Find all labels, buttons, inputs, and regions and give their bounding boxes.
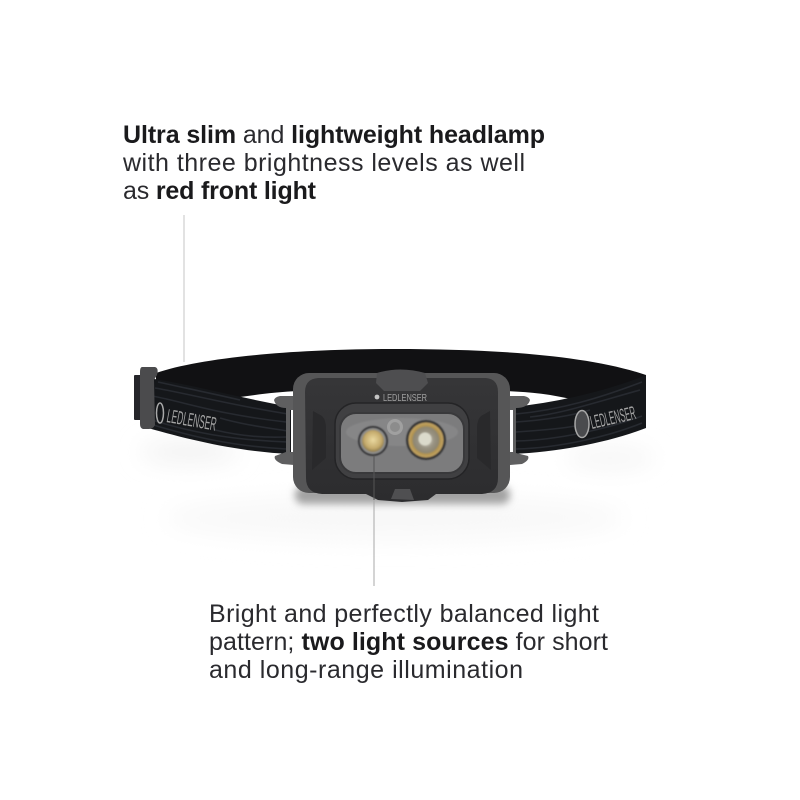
rear strap band: [156, 349, 646, 400]
text block: lower callout text: pattern; two light sources for short: [209, 628, 608, 656]
large LED: [406, 420, 446, 460]
heading: top callout text: with three brightness levels as well: [122, 149, 525, 177]
side clips: [274, 396, 530, 465]
leader line: lower callout to LED: [373, 456, 375, 586]
right front strap with logo: LEDLENSER: [588, 403, 638, 434]
heading: top callout text: as red front light: [123, 177, 317, 205]
bottom clip: [391, 489, 414, 500]
left front strap with logo: [148, 378, 291, 454]
leader line: top callout to strap: [183, 215, 185, 362]
housing outer shell: [293, 373, 510, 493]
top button: [376, 370, 428, 391]
right front strap with logo: [513, 375, 646, 454]
headlamp: [134, 349, 646, 502]
floor shadow under headlamp: [140, 442, 655, 540]
housing logo: [375, 392, 427, 404]
text block: lower callout text: [209, 600, 608, 684]
housing front: [305, 378, 498, 502]
heading: top callout text: Ultra slim and lightweight headlamp: [123, 121, 545, 149]
side recesses: [312, 411, 491, 470]
small LED: [358, 426, 388, 456]
left front strap with logo: LEDLENSER: [165, 406, 218, 436]
housing logo: LEDLENSER: [383, 392, 427, 404]
left buckle: [134, 367, 158, 429]
text block: lower callout text: Bright and perfectly balanced light: [209, 600, 599, 628]
heading: top callout text: [122, 121, 545, 205]
sensor dot: [388, 420, 402, 434]
text block: lower callout text: and long-range illumination: [209, 656, 523, 684]
lens panel: [335, 403, 469, 479]
